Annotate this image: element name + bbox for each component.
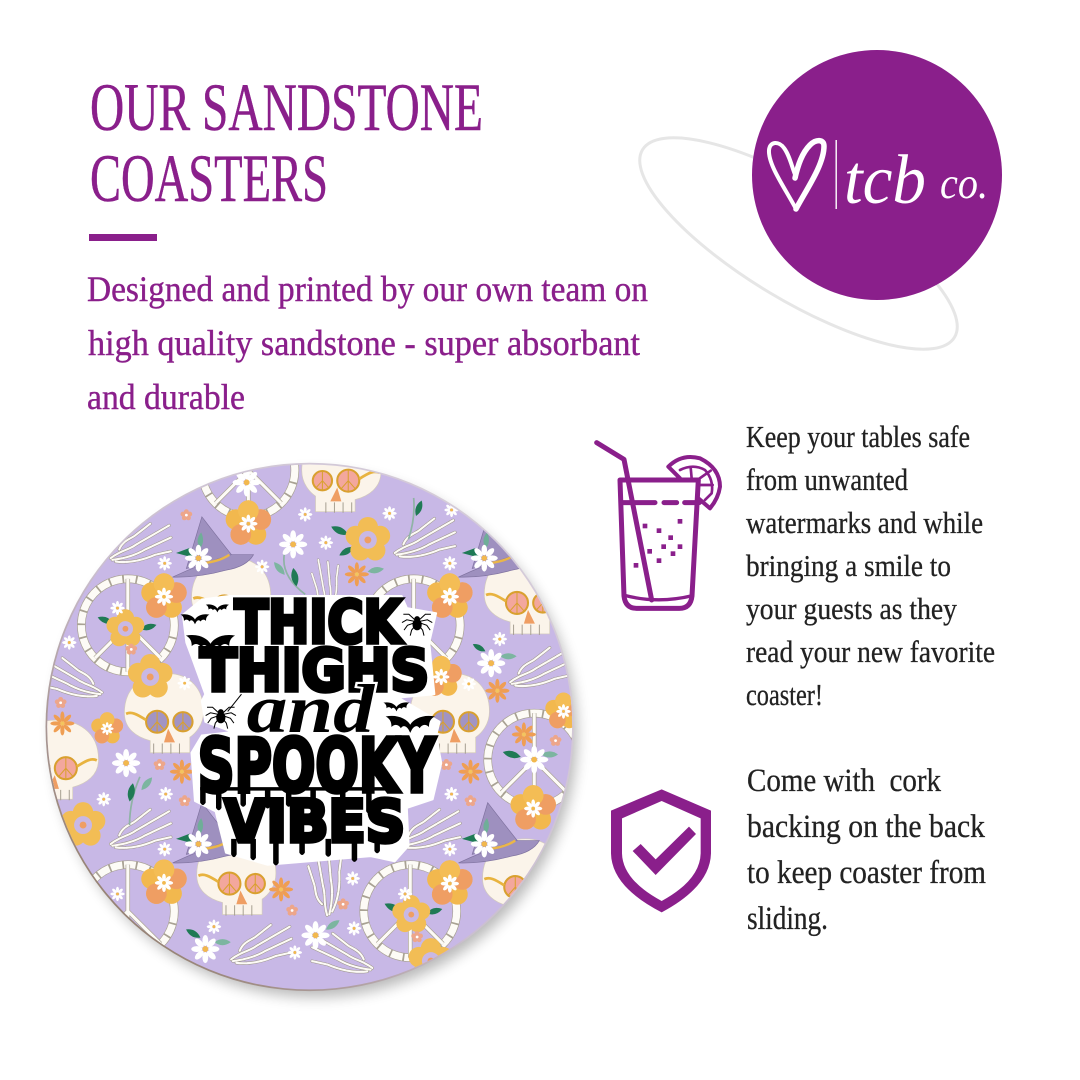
- logo wordmark: [844, 142, 988, 219]
- coaster: [46, 462, 574, 992]
- title: OUR SANDSTONE: [90, 69, 483, 145]
- sticker white backing: [183, 596, 441, 865]
- text: cork backing: backing on the back: [747, 809, 985, 845]
- text: keep your tables safe: [746, 419, 995, 712]
- sticker lettering: THICK: [235, 589, 404, 657]
- intro text: Designed and printed by our own team on: [87, 269, 648, 309]
- text: keep your tables safe: coaster!: [746, 677, 823, 712]
- intro text: [87, 269, 648, 417]
- text: cork backing: to keep coaster from: [747, 855, 986, 891]
- sticker lettering: SPOOKY: [198, 723, 436, 809]
- logo wordmark: co.: [940, 159, 988, 208]
- text: keep your tables safe: your guests as they: [746, 591, 957, 626]
- icon: shield with check: [611, 789, 711, 912]
- title underline: [89, 234, 157, 241]
- sticker lettering: VIBES: [224, 788, 405, 856]
- logo wordmark: tcb: [844, 142, 926, 219]
- text: keep your tables safe: bringing a smile to: [746, 548, 951, 583]
- coaster pattern: [47, 464, 572, 974]
- script word and: and: [247, 671, 376, 747]
- sticker: thick thighs and spooky vibes: [181, 589, 441, 865]
- sticker lettering: [198, 589, 436, 856]
- text: cork backing: [747, 763, 986, 937]
- text: keep your tables safe: read your new favorite: [746, 634, 995, 669]
- icon: drinking glass with lime: [597, 443, 720, 608]
- title: [90, 69, 483, 216]
- text: keep your tables safe: from unwanted: [746, 462, 908, 497]
- icon: spiders: [206, 614, 432, 729]
- coaster shadow: [53, 473, 577, 997]
- text: keep your tables safe: watermarks and while: [746, 505, 983, 540]
- text: cork backing: sliding.: [747, 901, 828, 937]
- icon: bats: [181, 604, 435, 733]
- icon: heart: [769, 141, 824, 209]
- intro text: and durable: [87, 377, 245, 417]
- text: cork backing: Come with cork: [747, 763, 941, 799]
- paint drips: [200, 787, 389, 865]
- intro text: high quality sandstone - super absorbant: [88, 323, 640, 363]
- logo badge: [752, 50, 1002, 300]
- decorative orbit ellipse: [613, 101, 984, 386]
- sticker lettering: THIGHS: [200, 637, 429, 705]
- logo divider: [836, 140, 837, 209]
- text: keep your tables safe: Keep your tables safe: [746, 419, 970, 454]
- title: COASTERS: [90, 140, 328, 216]
